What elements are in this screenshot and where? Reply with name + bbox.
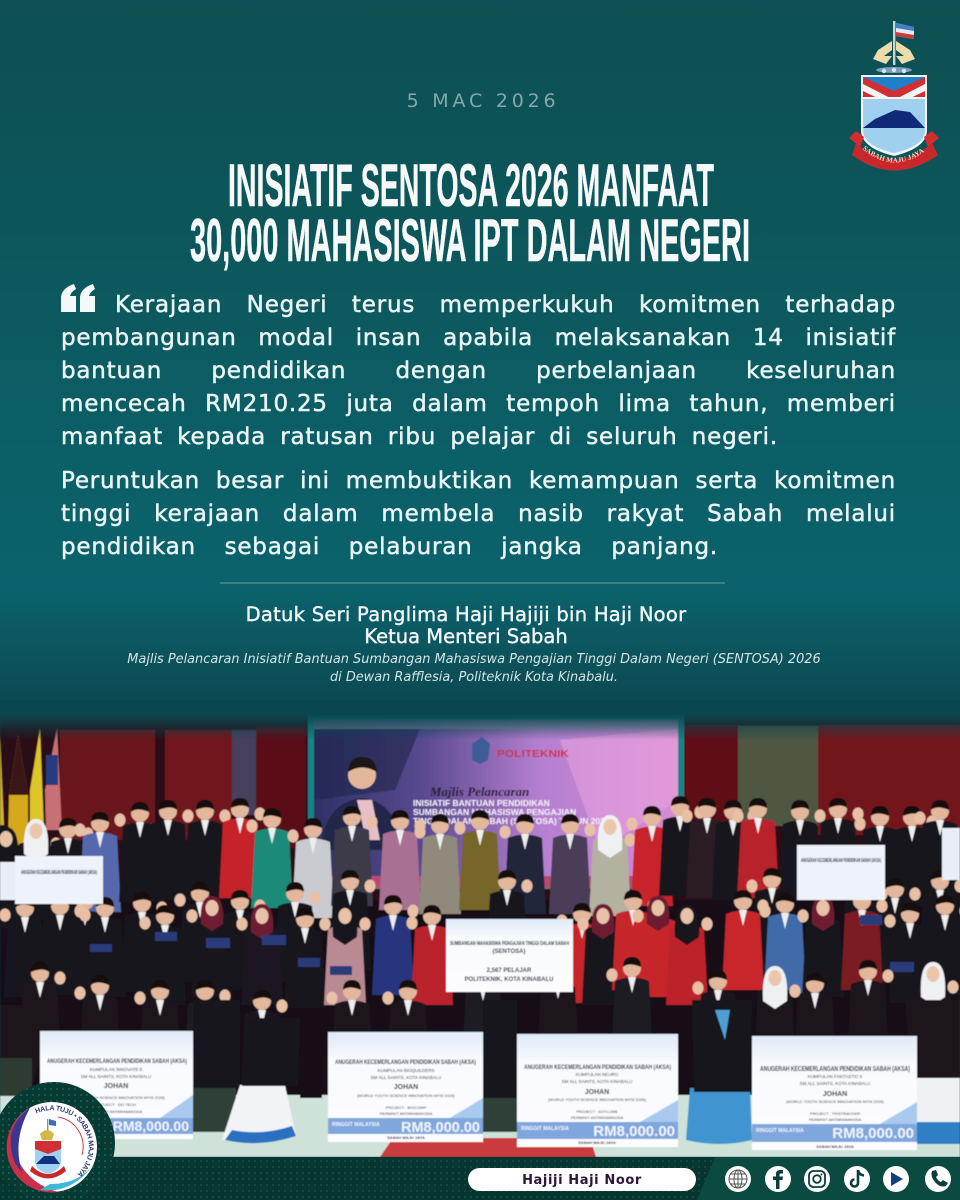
backdrop banner [308,714,684,889]
backdrop banner: SUMBANGAN MAHASISWA PENGAJIAN [413,807,576,817]
cheque 1: KUMPULAN INNOVATE 8 [90,1067,143,1072]
stage step and floor [0,900,960,1157]
icon: facebook [765,1166,791,1192]
cheque 4 [752,1036,917,1150]
cheque 4: (WORLD YOUTH SCIENCE INNOVATION MYSI 2026) [786,1099,885,1104]
name pill [468,1168,696,1191]
footer bar [0,1157,960,1200]
cheque 1: ANUGERAH KECEMERLANGAN PENDIDIKAN SABAH (AKSA) [47,1058,187,1065]
cheque 1 [40,1031,193,1139]
cheque 4: SM ALL SAINTS, KOTA KINABALU [800,1081,870,1086]
cheque 3: RINGGIT MALAYSIA [521,1126,569,1132]
paragraph 1: mencecah RM210.25 juta dalam tempoh lima tahun, memberi [61,391,896,417]
cheque 1: PROJECT : DO TECH [96,1102,136,1107]
cheque 2: RM8,000.00 [401,1120,480,1136]
cheque 2: JOHAN [394,1084,418,1091]
circular logo badge [0,1082,115,1198]
speaker name: Datuk Seri Panglima Haji Hajiji bin Haji Noor [246,603,686,626]
paragraph 2: tinggi kerajaan dalam membela nasib rakyat Sabah melalui [61,501,896,527]
cheque 4: PERMINIT ANTARABANGSA [809,1117,862,1122]
cheque 2: KUMPULAN BIOQUILDERS [377,1068,435,1073]
backdrop banner: Majlis Pelancaran [429,784,529,799]
paragraph 1: manfaat kepada ratusan ribu pelajar di seluruh negeri. [61,424,778,450]
state crest [849,21,939,170]
cheque 3: PERMINIT ANTARABANGSA [571,1115,624,1120]
event caption: di Dewan Rafflesia, Politeknik Kota Kinabalu. [330,670,618,685]
title [190,152,750,274]
icon: phone [925,1166,951,1192]
back row of people [0,796,960,928]
event caption: Majlis Pelancaran Inisiatif Bantuan Sumbangan Mahasiswa Pengajian Tinggi Dalam Negeri (SENTOSA) 2026 [127,652,821,667]
cheque 1: SM ALL SAINTS, KOTA KINABALU [81,1074,151,1079]
cheque 1: PERMINIT ANTARABANGSA [90,1109,143,1114]
cheque 4: ANUGERAH KECEMERLANGAN PENDIDIKAN SABAH (AKSA) [760,1066,910,1073]
cheque 2: (WORLD YOUTH SCIENCE INNOVATION MYSI 2026) [357,1093,456,1098]
cheque 2: RINGGIT MALAYSIA [332,1122,380,1128]
attribution [127,603,821,685]
centre cheque: (SENTOSA) [493,949,525,955]
cheque 4: RM8,000.00 [832,1125,914,1142]
cheque 2 [328,1032,483,1142]
flags [0,728,62,845]
small cheque left [0,856,103,904]
small cheque right [797,828,960,900]
paragraph 1: Kerajaan Negeri terus memperkukuh komitmen terhadap [115,292,896,318]
icon: tiktok [844,1166,870,1192]
date: 5 MAC 2026 [407,90,559,112]
cheque 3: SM ALL SAINTS, KOTA KINABALU [562,1079,632,1084]
paragraph 2: Peruntukan besar ini membuktikan kemampuan serta komitmen [61,468,896,494]
backdrop banner: TINGGI DALAM SABAH (SENTOSA) TAHUN 2026 [413,816,610,826]
divider [220,582,725,584]
cheque 4: PROJECT : TRISTRACKER [810,1111,860,1116]
circular logo badge: HALA TUJU • SABAH MAJU JAYA [35,1105,94,1176]
small cheque right: ANUGERAH KECEMERLANGAN PENDIDIKAN SABAH (AKSA) [801,858,881,864]
cheque 2: SABAH MAJU JAYA [387,1135,425,1140]
cheque 4: JOHAN [823,1091,847,1098]
cheque 4: RINGGIT MALAYSIA [756,1128,804,1134]
speaker role: Ketua Menteri Sabah [364,625,568,648]
cheque 1: (WORLD YOUTH SCIENCE INNOVATION MYSI 2026) [67,1095,166,1100]
cheque 3 [517,1034,678,1147]
cheque 1: RM8,000.00 [113,1118,189,1134]
cheque 2: ANUGERAH KECEMERLANGAN PENDIDIKAN SABAH (AKSA) [335,1059,476,1066]
stage curtains [0,715,960,905]
cheque 3: ANUGERAH KECEMERLANGAN PENDIDIKAN SABAH (AKSA) [524,1064,671,1071]
paragraph 1: pembangunan modal insan apabila melaksanakan 14 inisiatif [61,325,896,351]
front rows of people [0,957,960,1144]
cheque 3: KUMPULAN NEURO [576,1072,619,1077]
cheque 3: JOHAN [585,1089,609,1096]
icon: youtube play [883,1166,909,1192]
paragraph 1 [61,292,896,450]
backdrop banner: POLITEKNIK [497,749,570,760]
quote body text [61,292,896,560]
cheque 1: JOHAN [104,1083,128,1090]
cheque 3: (WORLD YOUTH SCIENCE INNOVATION MYSI 2026) [548,1097,647,1102]
cheque 3: PROJECT : SOYLUME [576,1109,618,1114]
quote mark [61,284,95,312]
event caption [127,652,821,685]
paragraph 2: pendidikan sebagai pelaburan jangka panjang. [61,534,718,560]
cheque 4: SABAH MAJU JAYA [816,1144,854,1149]
middle rows of people [0,868,960,1008]
cheque 2: PROJECT : BIOCOMP [386,1105,427,1110]
centre cheque: SUMBANGAN MAHASISWA PENGAJIAN TINGGI DALAM SABAH [450,941,569,947]
paragraph 1: bantuan pendidikan dengan perbelanjaan keseluruhan [61,358,896,384]
state crest: SABAH MAJU JAYA [862,146,924,162]
cheque 3: SABAH MAJU JAYA [578,1140,616,1145]
centre cheque: POLITEKNIK, KOTA KINABALU [464,977,554,983]
cheque 3: RM8,000.00 [593,1123,675,1140]
icon: globe [725,1166,751,1192]
cheque 4: KUMPULAN FANTASTIC 5 [808,1074,863,1079]
cheque 2: PERMINIT ANTARABANGSA [380,1111,433,1116]
name pill: Hajiji Haji Noor [522,1173,642,1188]
backdrop banner: INISIATIF BANTUAN PENDIDIKAN [413,798,550,808]
small cheque left: ANUGERAH KECEMERLANGAN PENDIDIKAN SABAH (AKSA) [21,870,97,876]
icon: instagram [804,1166,830,1192]
paragraph 2 [61,468,896,560]
centre cheque [446,919,573,992]
cheque 2: SM ALL SAINTS, KOTA KINABALU [371,1075,441,1080]
centre cheque: 2,567 PELAJAR [487,968,532,974]
